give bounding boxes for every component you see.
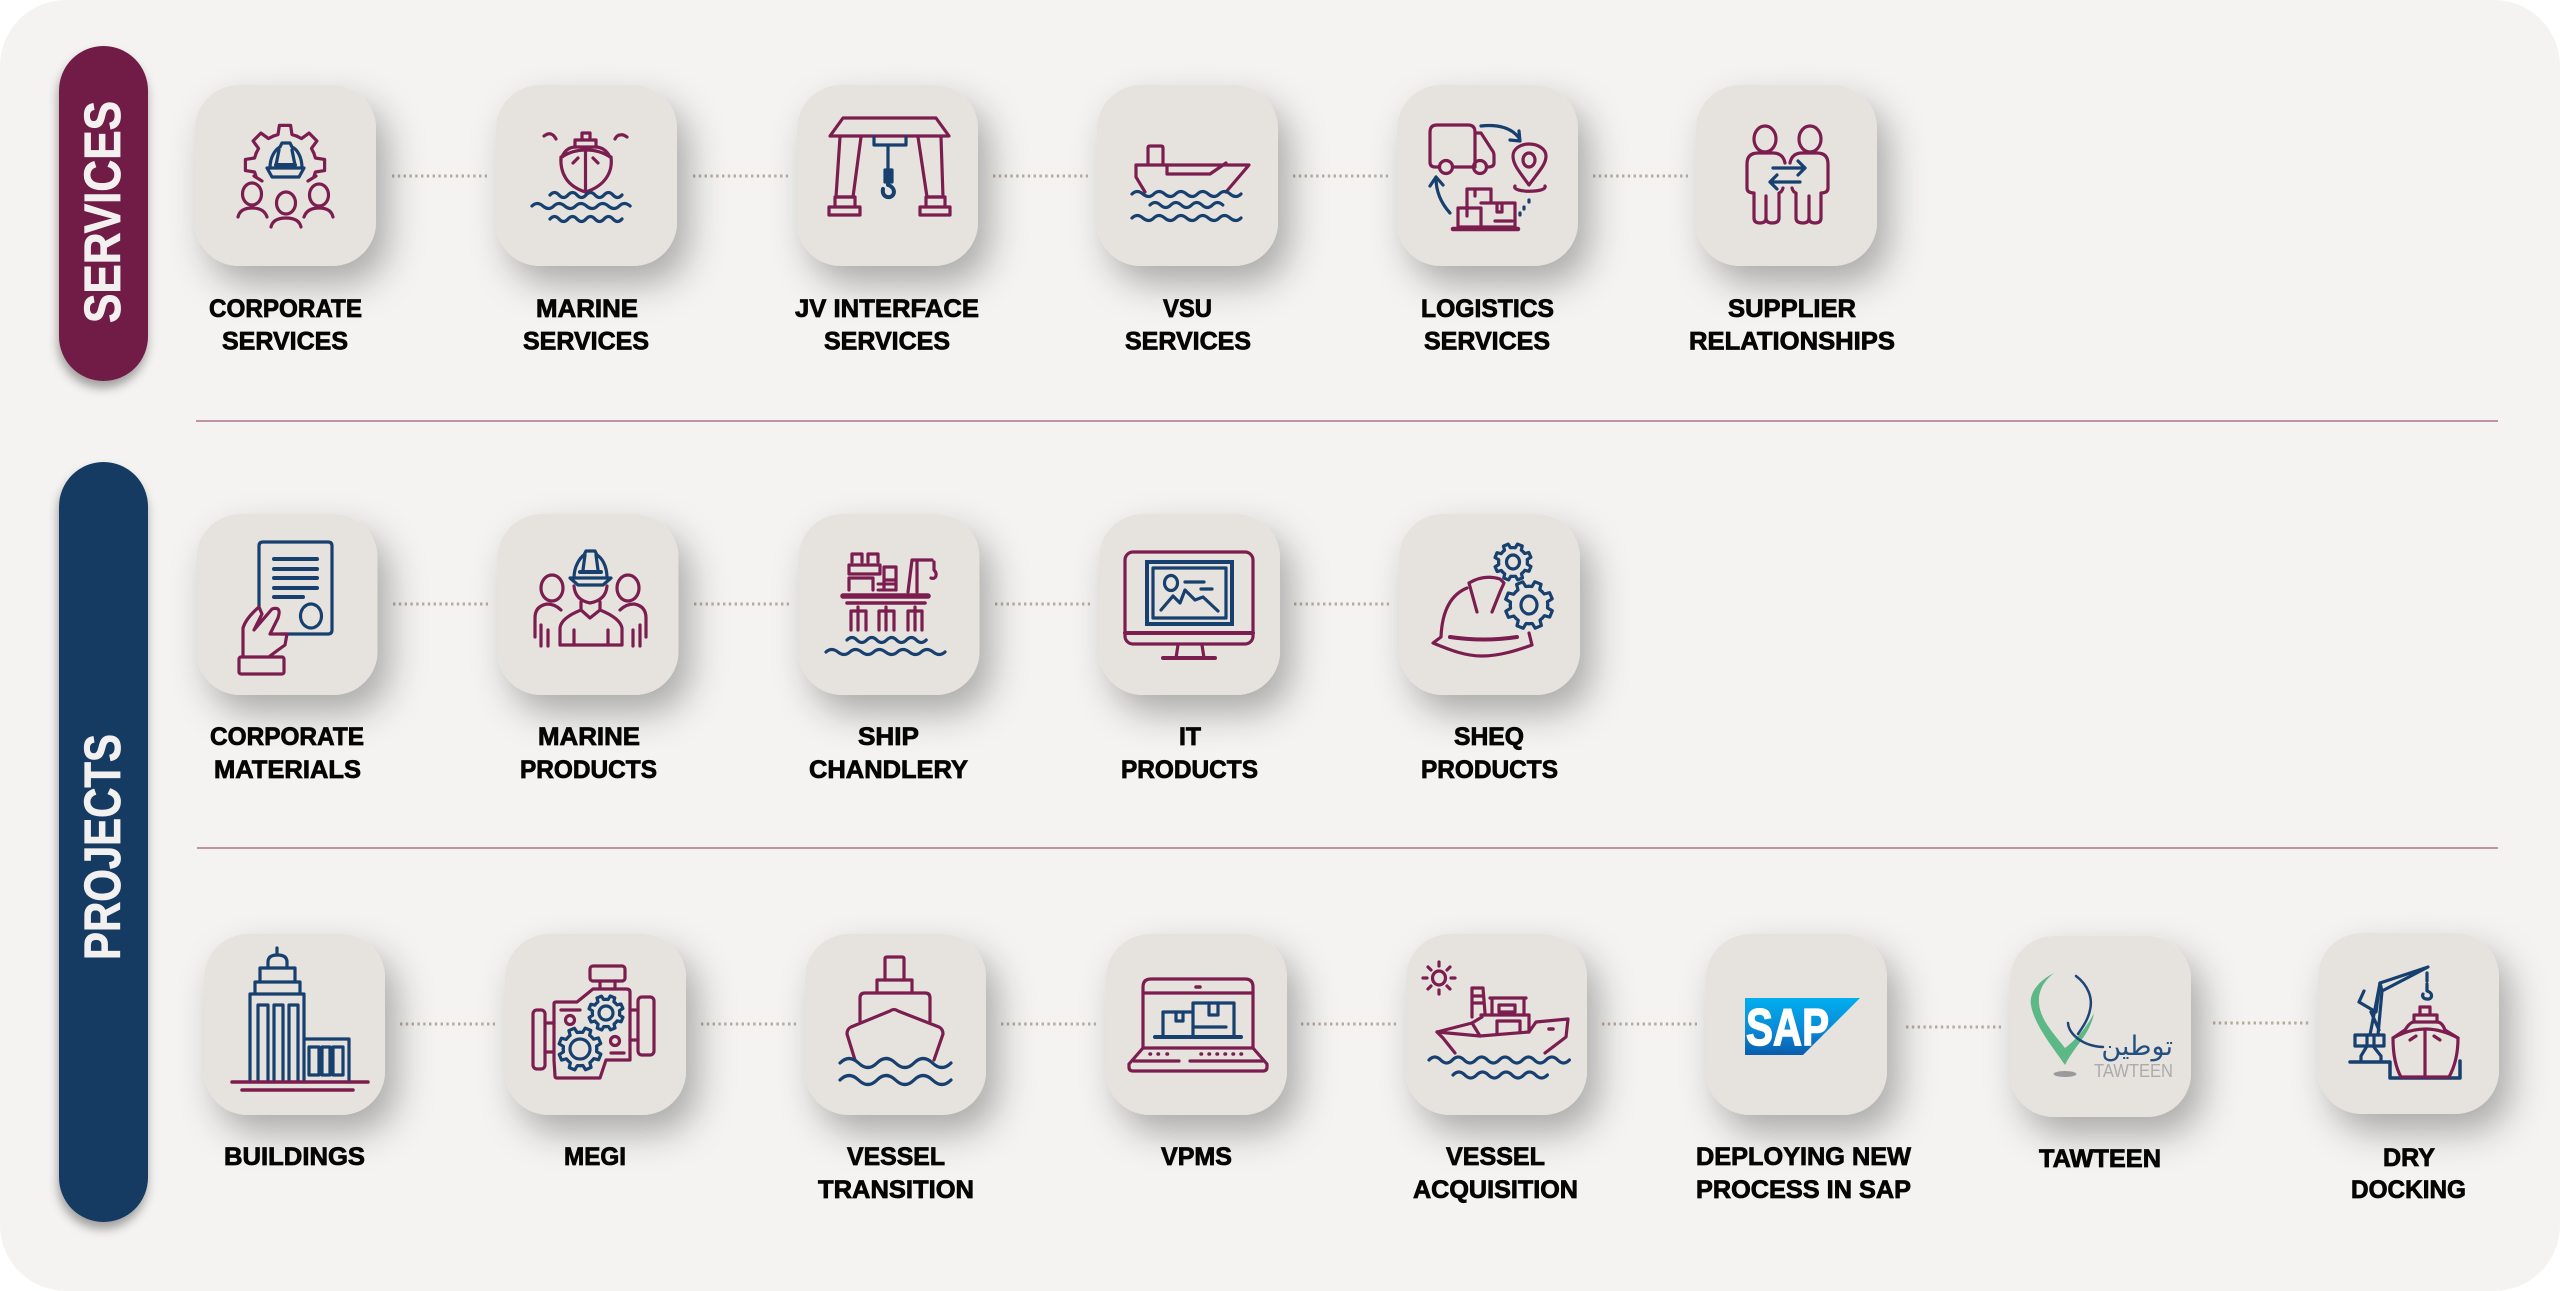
- icon: truck, location pin and boxes: [1430, 125, 1546, 229]
- icon: hand holding document: [239, 542, 332, 674]
- icon: monitor with picture: [1125, 552, 1253, 658]
- label: ACQUISITION: [1413, 1176, 1578, 1204]
- label: BUILDINGS: [224, 1143, 365, 1171]
- tile: [498, 514, 678, 695]
- section tab: services: [59, 46, 148, 381]
- section tab: projects: PROJECTS: [74, 734, 131, 960]
- icon: tawteen logo: توطين: [2101, 1031, 2173, 1062]
- row: products: [196, 514, 1580, 784]
- icon: tawteen logo: [2031, 973, 2173, 1081]
- label: IT: [1179, 723, 1201, 751]
- tile: [1696, 85, 1877, 266]
- label: [1125, 295, 1251, 356]
- connector: [393, 602, 488, 606]
- connector: [1602, 1022, 1697, 1026]
- tile: [2318, 933, 2499, 1114]
- tile: [1099, 514, 1280, 695]
- tile: [1706, 934, 1887, 1115]
- label: DRY: [2383, 1144, 2435, 1172]
- item: vessel acquisition: [1406, 934, 1587, 1204]
- connector: [1301, 1022, 1396, 1026]
- label: [818, 1143, 974, 1204]
- icon: tawteen logo: TAWTEEN: [2094, 1061, 2173, 1081]
- connector: [701, 1022, 796, 1026]
- label: VSU: [1163, 295, 1212, 323]
- connector: [1294, 602, 1389, 606]
- item: jv interface services: [795, 85, 979, 356]
- label: SERVICES: [1125, 328, 1251, 356]
- label: MARINE: [538, 723, 640, 751]
- icon: ship on waves: [532, 133, 630, 222]
- item: vessel transition: [805, 934, 986, 1204]
- tile: [1399, 514, 1580, 695]
- connector: [1593, 174, 1688, 178]
- label: PRODUCTS: [1121, 756, 1258, 784]
- icon: three workers with helmet: [535, 551, 646, 646]
- label: [520, 723, 657, 784]
- label: [1121, 723, 1258, 784]
- connector: [693, 174, 788, 178]
- item: vsu services: [1097, 85, 1278, 356]
- label: CHANDLERY: [809, 756, 968, 784]
- label: CORPORATE: [209, 295, 362, 323]
- tile: [1106, 934, 1287, 1115]
- label: SERVICES: [222, 328, 348, 356]
- connector: [400, 1022, 495, 1026]
- tile: [805, 934, 986, 1115]
- icon: tugboat with sun: [1423, 962, 1569, 1078]
- label: [1413, 1143, 1578, 1204]
- item: tawteen: [2010, 936, 2191, 1173]
- icon: helmet and gears: [1433, 538, 1560, 656]
- item: deploying new process in sap: [1696, 934, 1911, 1204]
- tile: [195, 85, 376, 266]
- icon: laptop with boxes: [1129, 979, 1267, 1071]
- label: [795, 295, 979, 356]
- item: marine products: [498, 514, 678, 784]
- icon: skyscraper: [232, 948, 368, 1090]
- label: [1689, 295, 1895, 356]
- connector: [694, 602, 789, 606]
- label: JV INTERFACE: [795, 295, 979, 323]
- icon: sap logo: SAP: [1746, 999, 1829, 1057]
- connector: [1906, 1026, 2001, 1028]
- section tab: projects: [59, 462, 148, 1222]
- divider: services and projects: [196, 420, 2498, 422]
- icon: offshore platform: [826, 554, 945, 654]
- item: corporate services: [195, 85, 376, 356]
- tile: [1097, 85, 1278, 266]
- row: projects: [204, 933, 2499, 1204]
- icon: ship in dry dock with crane: [2350, 967, 2460, 1078]
- tile: [505, 934, 686, 1115]
- tile: [204, 934, 385, 1115]
- label: SUPPLIER: [1728, 295, 1856, 323]
- tile: [496, 85, 677, 266]
- label: PROCESS IN SAP: [1696, 1176, 1911, 1204]
- label: [1421, 723, 1558, 784]
- item: marine services: [496, 85, 677, 356]
- item: corporate materials: [196, 514, 378, 784]
- label: SERVICES: [824, 328, 950, 356]
- icon: ship front view: [840, 957, 951, 1084]
- label: TRANSITION: [818, 1176, 974, 1204]
- item: buildings: [204, 934, 385, 1171]
- tile: [798, 514, 980, 695]
- label: VPMS: [1161, 1143, 1232, 1171]
- tile: [2010, 936, 2191, 1117]
- item: megi: [505, 934, 686, 1171]
- connector: [995, 602, 1090, 606]
- label: [209, 295, 362, 356]
- label: CORPORATE: [210, 723, 364, 751]
- label: [1421, 295, 1554, 356]
- label: PRODUCTS: [1421, 756, 1558, 784]
- label: SERVICES: [523, 328, 649, 356]
- connector: [2213, 1022, 2309, 1024]
- item: logistics services: [1397, 85, 1578, 356]
- row: services: [195, 85, 1895, 356]
- label: VESSEL: [847, 1143, 945, 1171]
- tile: [797, 85, 978, 266]
- label: DEPLOYING NEW: [1696, 1143, 1911, 1171]
- label: MARINE: [536, 295, 638, 323]
- connector: [993, 174, 1088, 178]
- divider: products and projects: [197, 847, 2498, 849]
- tile: [196, 514, 378, 695]
- label: [523, 295, 649, 356]
- label: SHIP: [858, 723, 919, 751]
- label: [2351, 1144, 2466, 1204]
- connector: [392, 174, 487, 178]
- item: dry docking: [2318, 933, 2499, 1204]
- icon: gantry crane: [829, 118, 950, 215]
- item: sheq products: [1399, 514, 1580, 784]
- icon: gear with helmet and team: [238, 125, 333, 227]
- label: LOGISTICS: [1421, 295, 1554, 323]
- label: [1696, 1143, 1911, 1204]
- connector: [1001, 1022, 1096, 1026]
- item: supplier relationships: [1689, 85, 1895, 356]
- label: SERVICES: [1424, 328, 1550, 356]
- label: MEGI: [564, 1143, 626, 1171]
- tile: [1406, 934, 1587, 1115]
- icon: engine with gears: [533, 966, 654, 1078]
- label: TAWTEEN: [2039, 1145, 2161, 1173]
- label: VESSEL: [1446, 1143, 1545, 1171]
- label: DOCKING: [2351, 1176, 2466, 1204]
- connector: [1293, 174, 1388, 178]
- label: MATERIALS: [214, 756, 361, 784]
- label: [809, 723, 968, 784]
- label: [210, 723, 364, 784]
- item: vpms: [1106, 934, 1287, 1171]
- icon: two people exchanging: [1747, 126, 1828, 223]
- icon: vessel: [1132, 146, 1249, 220]
- item: ship chandlery: [798, 514, 980, 784]
- label: SHEQ: [1454, 723, 1524, 751]
- tile: [1397, 85, 1578, 266]
- item: it products: [1099, 514, 1280, 784]
- section tab: services: SERVICES: [74, 101, 131, 323]
- label: RELATIONSHIPS: [1689, 328, 1895, 356]
- label: PRODUCTS: [520, 756, 657, 784]
